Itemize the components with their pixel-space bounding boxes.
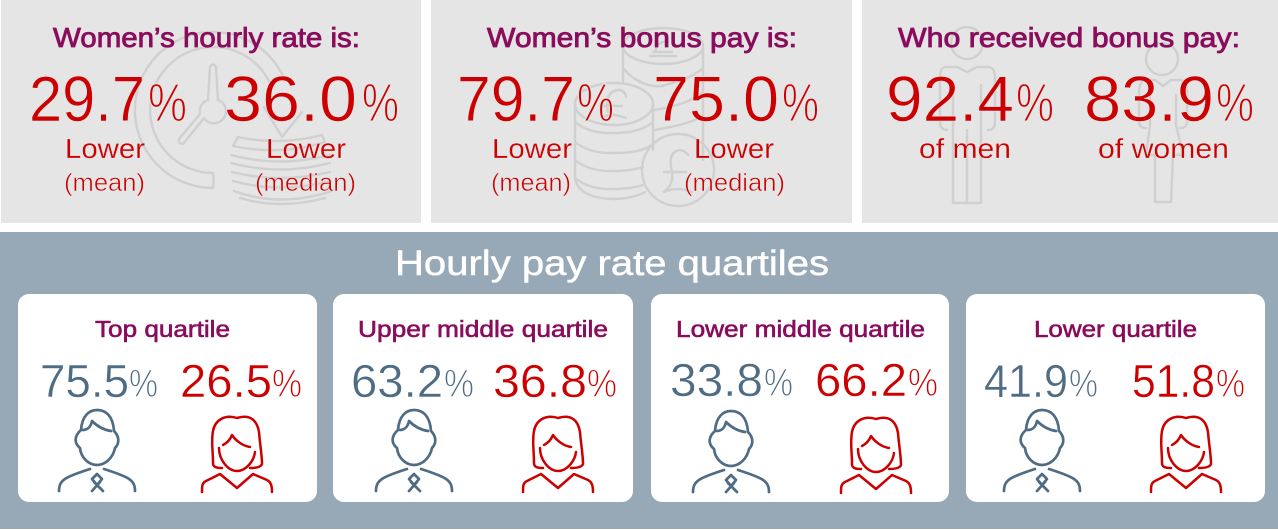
stat: 36.0% lower median: % xyxy=(362,73,399,133)
men share 63.2%: 63.2 xyxy=(351,355,443,407)
icon: woman xyxy=(523,417,593,492)
card title: Lower quartile xyxy=(1034,316,1197,342)
stat: 36.0% lower median: 36.0 xyxy=(224,63,357,135)
stat: 92.4% of men xyxy=(886,63,1054,164)
card title: Top quartile xyxy=(95,316,230,342)
women share 51.8%: 51.8 xyxy=(1132,355,1215,407)
card: top quartile xyxy=(18,294,317,502)
panel: hourly pay rate quartiles xyxy=(0,232,1278,529)
stat: 29.7% lower mean: 29.7 xyxy=(29,63,145,135)
stat: 83.9% of women: % xyxy=(1216,73,1254,133)
women share 66.2%: % xyxy=(908,362,938,405)
heading: women's hourly rate is: Women’s hourly rate is: xyxy=(53,22,360,53)
stat: 92.4% of men: of men xyxy=(919,133,1011,164)
stat: 75.0% lower median xyxy=(653,63,819,197)
stat: 75.0% lower median: Lower xyxy=(694,133,774,164)
women share 26.5%: % xyxy=(272,363,302,406)
men share 41.9%: % xyxy=(1069,363,1098,406)
icon: man and woman figures watermark xyxy=(940,27,1187,203)
men share 33.8%: 33.8 xyxy=(670,354,763,406)
women share 26.5%: 26.5 xyxy=(180,355,272,407)
card title: Upper middle quartile xyxy=(358,316,608,342)
stat: 29.7% lower mean xyxy=(29,63,187,197)
icon: man xyxy=(376,410,452,491)
stat: 83.9% of women: 83.9 xyxy=(1084,63,1214,135)
men share 33.8%: % xyxy=(764,362,793,405)
icon: woman xyxy=(202,417,272,492)
card: lower quartile xyxy=(966,294,1265,502)
women share 66.2%: 66.2 xyxy=(815,354,907,406)
stat: 79.7% lower mean: 79.7 xyxy=(457,63,575,135)
stat: 29.7% lower mean: % xyxy=(148,73,187,133)
women share 36.8%: % xyxy=(587,363,617,406)
stat: 75.0% lower median: 75.0 xyxy=(653,63,779,135)
icon: coins watermark xyxy=(575,28,714,206)
stat: 75.0% lower median: % xyxy=(782,73,819,133)
stat: 83.9% of women: of women xyxy=(1098,133,1229,164)
stat: 29.7% lower mean: (mean) xyxy=(64,169,145,197)
card title: Lower middle quartile xyxy=(676,316,925,342)
icon: man xyxy=(1004,410,1080,491)
stat: 92.4% of men: % xyxy=(1016,73,1054,133)
stat: 83.9% of women xyxy=(1084,63,1254,164)
stat: 79.7% lower mean: % xyxy=(577,73,614,133)
heading: women's bonus pay is: Women’s bonus pay is: xyxy=(487,22,797,53)
stat: 36.0% lower median xyxy=(224,63,399,197)
men share 63.2%: % xyxy=(444,363,474,406)
stat: 79.7% lower mean: (mean) xyxy=(491,169,571,197)
icon: man xyxy=(693,411,769,492)
stat: 79.7% lower mean: Lower xyxy=(492,133,572,164)
stat: 36.0% lower median: (median) xyxy=(255,169,356,197)
icon: woman xyxy=(841,418,911,493)
panel: women's hourly rate xyxy=(1,0,421,223)
stat: 36.0% lower median: Lower xyxy=(266,133,346,164)
icon: clock and banknotes watermark xyxy=(135,32,332,204)
icon: woman xyxy=(1151,417,1221,492)
icon: man xyxy=(59,410,135,491)
card: lower middle quartile xyxy=(651,294,949,502)
heading: who received bonus pay: Who received bonus pay: xyxy=(898,22,1240,53)
stat: 92.4% of men: 92.4 xyxy=(886,63,1014,135)
men share 75.5%: 75.5 xyxy=(40,355,129,407)
women share 36.8%: 36.8 xyxy=(493,355,587,407)
stat: 75.0% lower median: (median) xyxy=(684,169,785,197)
heading: hourly pay rate quartiles: Hourly pay rate quartiles xyxy=(395,244,829,283)
women share 51.8%: % xyxy=(1216,363,1245,406)
men share 75.5%: % xyxy=(129,363,158,406)
card: upper middle quartile xyxy=(333,294,633,502)
panel: who received bonus pay xyxy=(862,0,1278,223)
stat: 79.7% lower mean xyxy=(457,63,614,197)
men share 41.9%: 41.9 xyxy=(984,355,1068,407)
panel: women's bonus pay xyxy=(431,0,852,223)
stat: 29.7% lower mean: Lower xyxy=(65,133,145,164)
